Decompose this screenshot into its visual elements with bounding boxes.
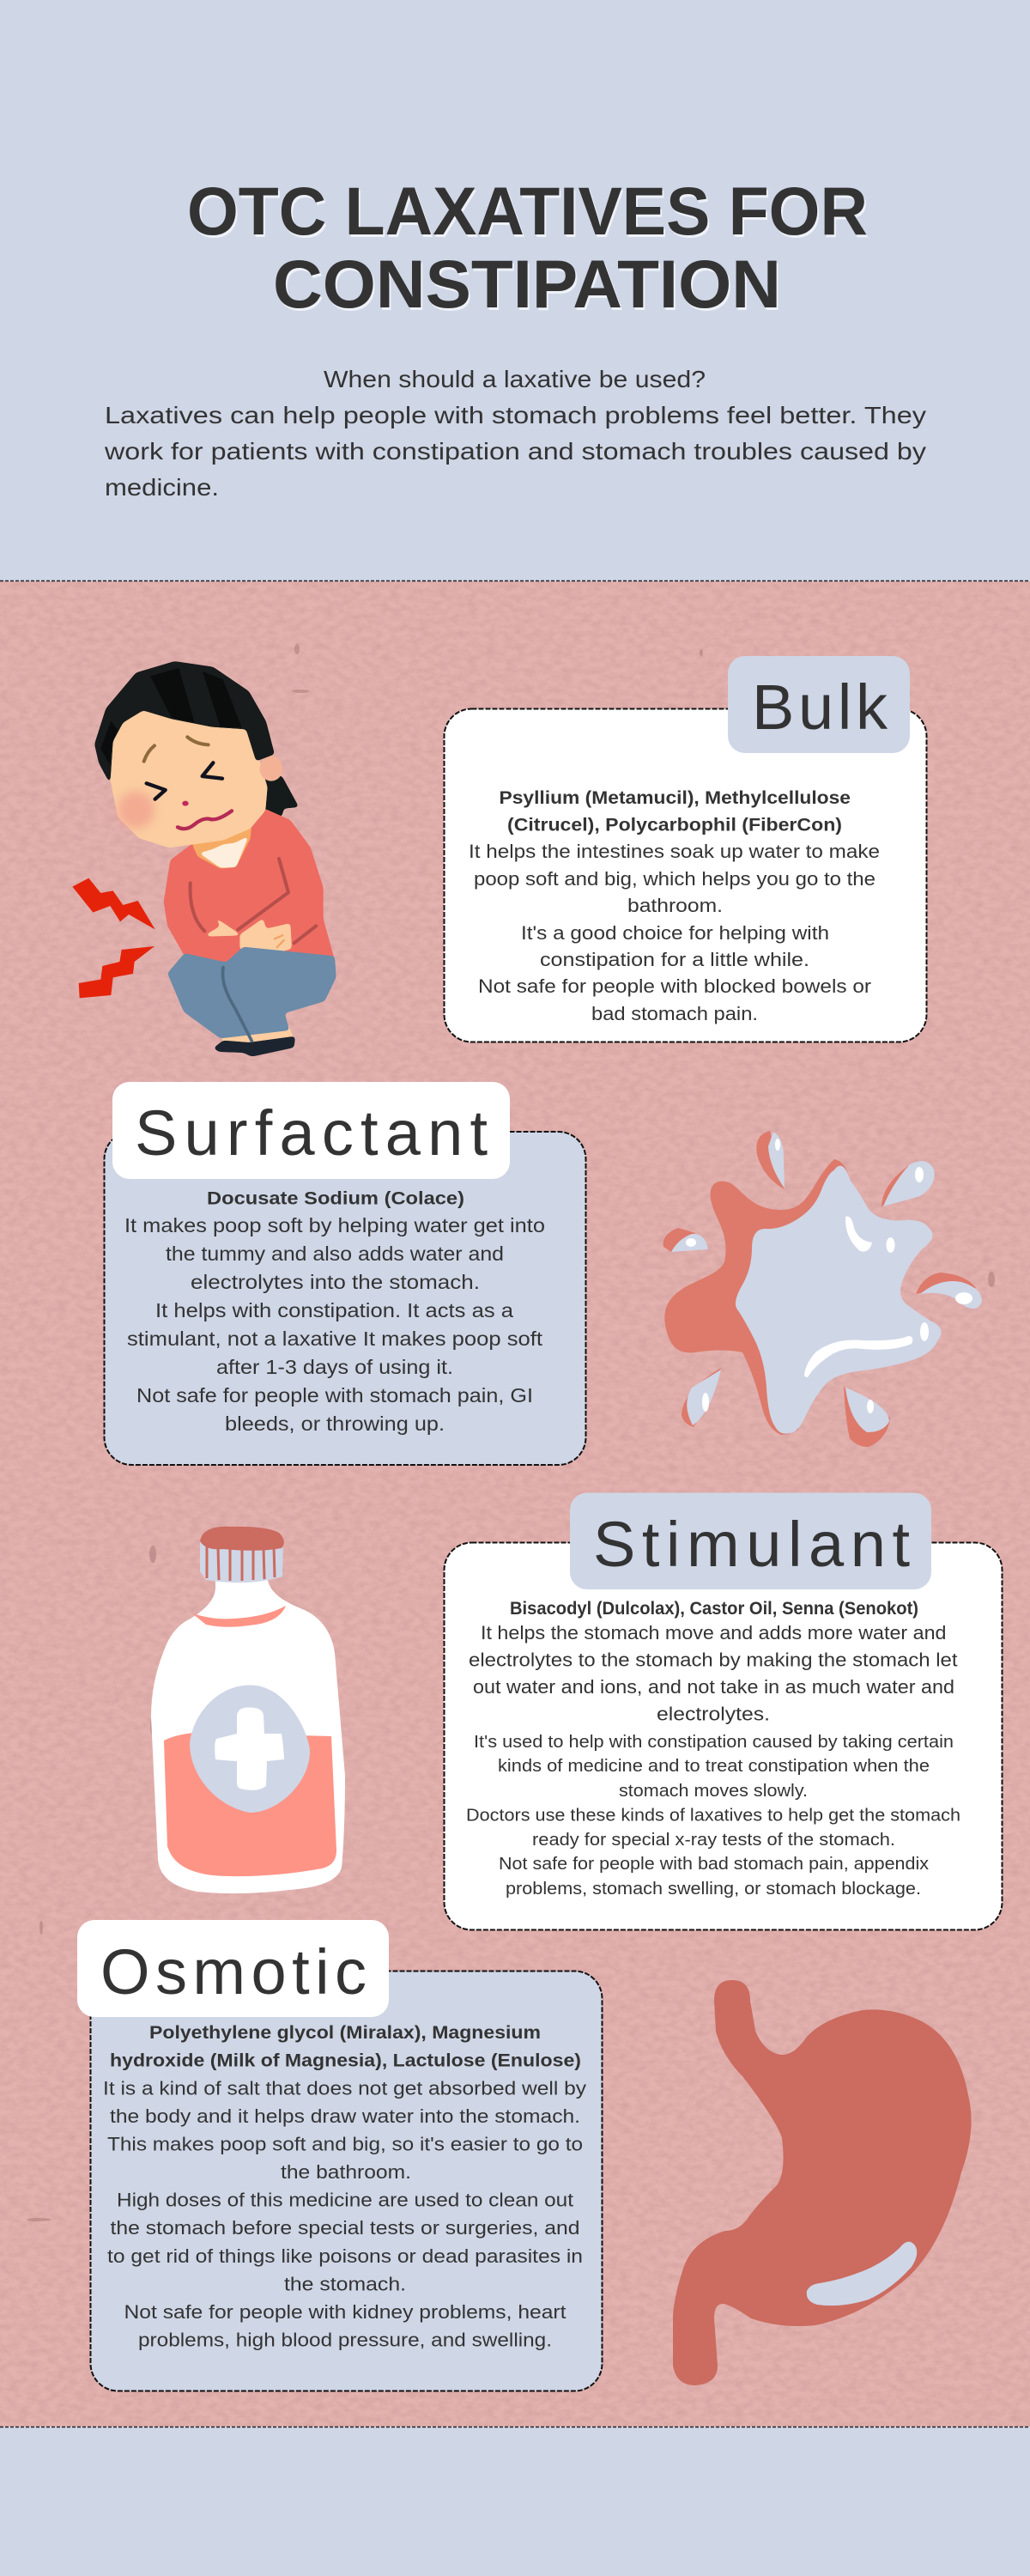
osmotic body text: High doses of this medicine are used to clean out	[117, 2190, 573, 2210]
droplet red parts	[663, 1131, 976, 1447]
surfactant body text: after 1-3 days of using it.	[216, 1356, 453, 1378]
bulk body text: poop soft and big, which helps you go to the	[474, 868, 876, 890]
stimulant heading: Stimulant	[593, 1509, 910, 1580]
face	[109, 708, 268, 848]
intro text: Laxatives can help people with stomach problems feel better. They	[105, 402, 926, 428]
illustration: liquid splash	[663, 1131, 982, 1447]
osmotic body text: the stomach before special tests or surgeries, and	[110, 2217, 580, 2239]
bulk body text: (Citrucel), Polycarbophil (FiberCon)	[507, 816, 842, 835]
bulk heading: Bulk	[752, 671, 888, 743]
bottle neck smile	[192, 1606, 286, 1627]
bulk body text	[469, 788, 880, 1024]
hands	[206, 916, 242, 937]
illustration: medicine bottle	[151, 1527, 345, 1893]
stimulant body text: It's used to help with constipation caused by taking certain	[474, 1733, 954, 1752]
surfactant body text: electrolytes into the stomach.	[191, 1271, 480, 1293]
stimulant body text: kinds of medicine and to treat constipation when the	[498, 1757, 930, 1776]
osmotic body text: hydroxide (Milk of Magnesia), Lactulose (Enulose)	[110, 2050, 581, 2071]
pain bolt upper	[72, 878, 155, 929]
surfactant body text	[124, 1188, 545, 1435]
hair stripes	[100, 668, 242, 764]
sweater	[164, 809, 335, 968]
bulk body text: Psyllium (Metamucil), Methylcellulose	[500, 788, 851, 808]
droplet blue parts	[671, 1132, 982, 1432]
osmotic heading: Osmotic	[100, 1936, 367, 2008]
intro text	[104, 366, 926, 501]
bulk body text: Not safe for people with blocked bowels or	[478, 975, 871, 997]
splash highlights	[804, 1217, 929, 1377]
intro text: medicine.	[105, 474, 219, 501]
trouser crease	[222, 968, 251, 1041]
shoes	[213, 1036, 295, 1057]
stimulant body text: out water and ions, and not take in as much water and	[473, 1676, 954, 1698]
droplet highlights	[686, 1139, 972, 1413]
stimulant body text: It helps the stomach move and adds more water and	[481, 1622, 946, 1643]
osmotic body text: the bathroom.	[281, 2161, 411, 2183]
legs	[219, 1024, 295, 1046]
eyes	[147, 762, 222, 799]
stimulant body text: problems, stomach swelling, or stomach blockage.	[506, 1880, 921, 1899]
stimulant body text	[466, 1599, 960, 1899]
osmotic body text: problems, high blood pressure, and swelling.	[138, 2329, 552, 2351]
stomach organ	[673, 1980, 972, 2385]
osmotic body text: It is a kind of salt that does not get absorbed well by	[103, 2078, 586, 2099]
bottle label oval	[190, 1685, 310, 1813]
bottle cross	[215, 1707, 284, 1790]
nose	[182, 801, 189, 806]
surfactant body text: Docusate Sodium (Colace)	[207, 1188, 464, 1209]
splash shadow shape	[664, 1159, 858, 1435]
surfactant card	[105, 1132, 585, 1465]
sleeve lines	[191, 859, 316, 943]
bulk body text: constipation for a little while.	[540, 949, 809, 970]
osmotic body text: Polyethylene glycol (Miralax), Magnesium	[149, 2023, 541, 2043]
panel: surfactant	[105, 1082, 585, 1465]
collar	[191, 823, 251, 869]
bulk tab	[728, 656, 910, 753]
divider: bottom dashed line	[0, 2427, 1030, 2428]
osmotic card	[91, 1971, 603, 2391]
surfactant body text: Not safe for people with stomach pain, GI	[136, 1384, 533, 1406]
surfactant body text: stimulant, not a laxative It makes poop soft	[127, 1327, 543, 1350]
stimulant body text: stomach moves slowly.	[619, 1782, 808, 1801]
intro text: When should a laxative be used?	[324, 366, 706, 392]
osmotic body text	[103, 2023, 586, 2351]
bulk card	[445, 709, 927, 1042]
title: CONSTIPATION	[273, 246, 781, 322]
bulk body text: It helps the intestines soak up water to make	[469, 841, 880, 862]
splash liquid	[736, 1166, 942, 1434]
osmotic tab	[77, 1920, 389, 2017]
bulk body text: bad stomach pain.	[591, 1003, 758, 1024]
pain bolt lower	[79, 946, 154, 998]
intro text: work for patients with constipation and stomach troubles caused by	[104, 438, 926, 465]
illustration: woman with stomach ache	[72, 661, 336, 1057]
panel: bulk	[445, 656, 927, 1042]
bulk body text: It's a good choice for helping with	[521, 922, 829, 944]
surfactant body text: the tummy and also adds water and	[166, 1242, 504, 1265]
bottle cap ridges	[200, 1541, 283, 1583]
stimulant body text: electrolytes.	[657, 1704, 770, 1724]
fingers	[275, 935, 284, 947]
panel: osmotic	[77, 1920, 603, 2391]
surfactant body text: It helps with constipation. It acts as a	[155, 1299, 513, 1321]
background: top blue band	[0, 0, 1030, 581]
osmotic body text: Not safe for people with kidney problems, heart	[124, 2301, 566, 2323]
osmotic body text: the stomach.	[284, 2274, 406, 2294]
stimulant card	[445, 1542, 1003, 1930]
osmotic body text: the body and it helps draw water into the stomach.	[110, 2105, 580, 2127]
osmotic body text: This makes poop soft and big, so it's easier to go to	[107, 2133, 583, 2155]
left cheek	[118, 792, 154, 829]
trousers	[167, 947, 336, 1038]
surfactant heading: Surfactant	[135, 1097, 488, 1169]
stimulant body text: electrolytes to the stomach by making the stomach let	[469, 1649, 958, 1671]
title: OTC LAXATIVES FOR	[187, 173, 868, 249]
background: pink paper section	[0, 581, 1030, 2427]
divider: top dashed line	[0, 580, 1030, 582]
illustration: stomach	[673, 1980, 972, 2385]
stimulant body text: Doctors use these kinds of laxatives to help get the stomach	[466, 1807, 960, 1826]
undershirt	[199, 835, 249, 868]
bulk body text: bathroom.	[627, 895, 723, 916]
ear	[260, 756, 282, 781]
stimulant body text: ready for special x-ray tests of the stomach.	[532, 1831, 895, 1850]
surfactant body text: It makes poop soft by helping water get into	[124, 1214, 545, 1236]
title	[187, 173, 868, 322]
hair	[94, 661, 275, 784]
stimulant body text: Not safe for people with bad stomach pain, appendix	[499, 1855, 929, 1874]
bottle body	[151, 1571, 345, 1893]
panel: stimulant	[445, 1492, 1003, 1930]
eyebrows	[144, 737, 209, 762]
stimulant tab	[570, 1492, 931, 1589]
bottle liquid	[164, 1733, 336, 1876]
surfactant tab	[112, 1082, 510, 1179]
stimulant body text: Bisacodyl (Dulcolax), Castor Oil, Senna (Senokot)	[510, 1599, 918, 1619]
mouth	[178, 811, 232, 829]
stomach highlight	[807, 2242, 917, 2306]
surfactant body text: bleeds, or throwing up.	[225, 1413, 445, 1435]
bottle cap top	[200, 1527, 284, 1551]
background: bottom blue band	[0, 2427, 1030, 2576]
back hair	[260, 775, 299, 817]
osmotic body text: to get rid of things like poisons or dead parasites in	[107, 2245, 583, 2267]
